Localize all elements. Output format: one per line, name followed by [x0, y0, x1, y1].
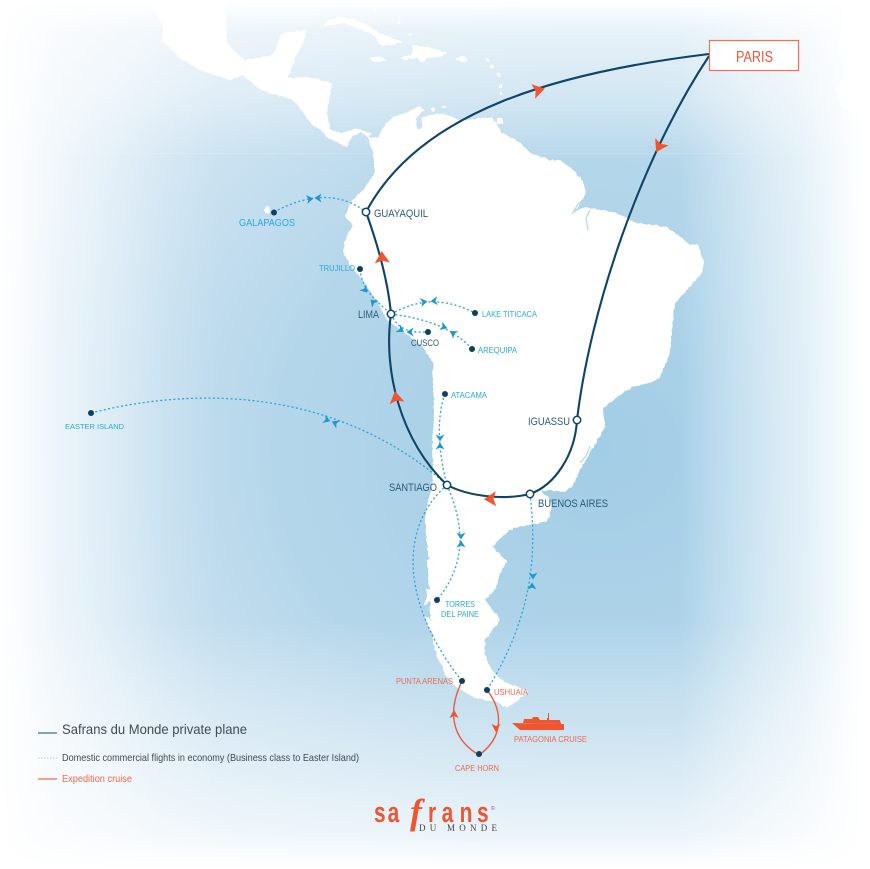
land: Africa edge — [835, 0, 870, 115]
legend: expedition cruise — [38, 773, 132, 785]
hub labels: BUENOS AIRES — [538, 498, 608, 510]
dotted domestic flights — [91, 198, 533, 690]
Paris box — [710, 40, 798, 70]
orange cruise labels: PUNTA ARENAS — [396, 676, 453, 686]
hub labels: CUSCO — [411, 338, 439, 349]
landmasses — [147, 0, 870, 708]
logo: DU MONDE — [419, 823, 498, 833]
hub labels — [358, 208, 608, 510]
logo: sa rans — [374, 797, 489, 829]
land: Galapagos — [264, 206, 270, 214]
hub labels: LIMA — [358, 309, 380, 321]
legend — [38, 721, 359, 785]
blue destination labels: LAKE TITICACA — [482, 309, 537, 319]
land: Jamaica — [370, 56, 387, 62]
blue destination labels: TRUJILLO — [319, 263, 355, 273]
Paris box: PARIS — [736, 49, 773, 66]
logo: f — [410, 792, 425, 832]
hub labels: SANTIAGO — [389, 482, 437, 494]
blue destination labels — [65, 217, 537, 619]
blue destination labels: GALAPAGOS — [239, 217, 295, 229]
orange cruise labels: PATAGONIA CRUISE — [514, 734, 587, 744]
blue destination labels: AREQUIPA — [478, 345, 517, 355]
land: South America — [343, 106, 704, 708]
land: Mexico and Central America — [147, 0, 372, 147]
hub labels: IGUASSU — [528, 416, 570, 428]
orange cruise labels: USHUAIA — [494, 687, 528, 697]
hub labels: GUAYAQUIL — [374, 208, 428, 220]
orange plane arrows — [374, 81, 668, 507]
blue destination labels: ATACAMA — [451, 390, 487, 400]
orange cruise labels: CAPE HORN — [455, 763, 499, 773]
blue destination labels: EASTER ISLAND — [65, 422, 125, 431]
land: Puerto Rico — [455, 56, 468, 62]
destination dots — [88, 210, 490, 757]
orange cruise labels — [396, 676, 587, 773]
land: Lesser Antilles — [375, 8, 503, 124]
rivers and lagoon — [572, 197, 590, 463]
legend: domestic flights: Domestic commercial flights in economy (Business class to Easter Island) — [62, 752, 359, 764]
cruise route lines — [454, 681, 499, 755]
logo: © — [491, 805, 495, 812]
legend: expedition cruise: Expedition cruise — [62, 773, 132, 785]
land: Cuba — [322, 17, 402, 45]
blue destination labels: DEL PAINE — [441, 609, 479, 619]
hub stop circles — [362, 208, 581, 498]
blue destination labels: TORRES — [445, 599, 475, 609]
land: Chilean islets — [424, 558, 446, 670]
blue flight arrows — [306, 194, 538, 590]
land: Hispaniola — [400, 45, 447, 63]
small orange cruise arrows — [450, 710, 500, 732]
private plane route — [366, 54, 709, 497]
icon: cruise ship — [512, 713, 564, 730]
legend: private plane: Safrans du Monde private plane — [62, 721, 247, 737]
